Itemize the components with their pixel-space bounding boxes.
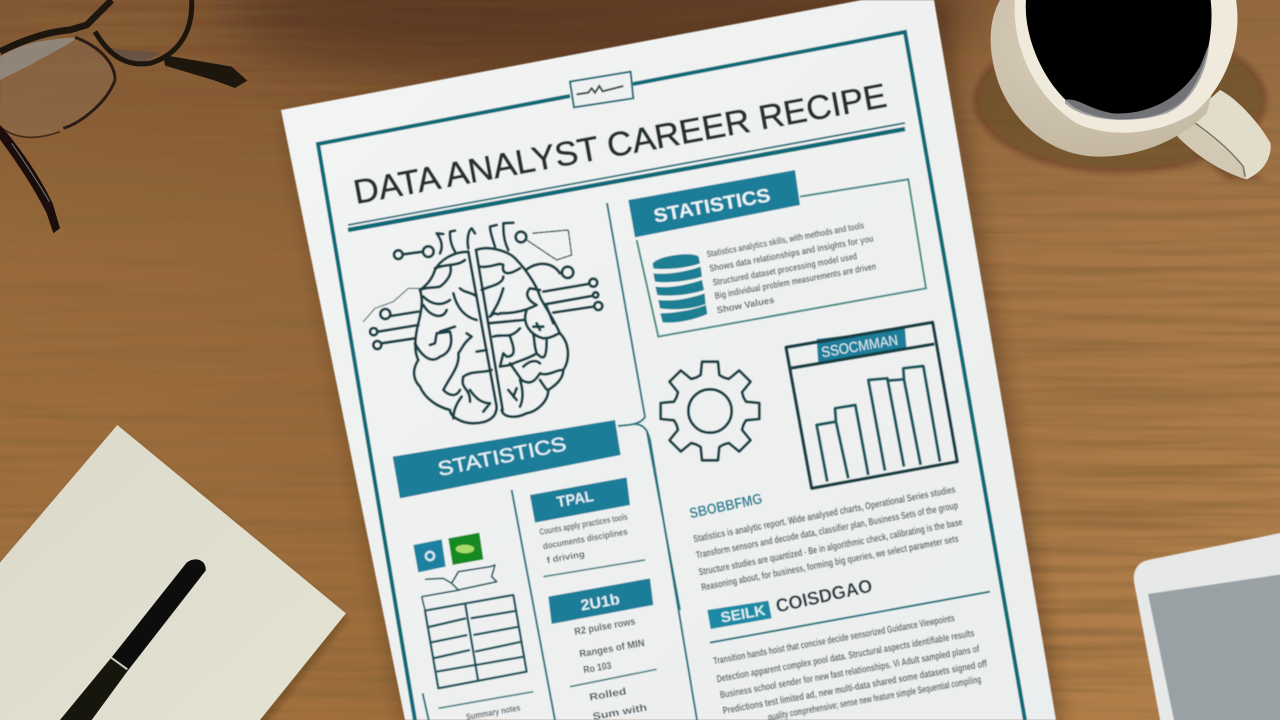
panel body text: Structured dataset processing model used bbox=[712, 251, 858, 288]
panel: statistics top bbox=[628, 170, 926, 337]
spreadsheet sketch bbox=[422, 565, 527, 688]
tab 2 list: Rolled bbox=[589, 686, 627, 704]
icon: teal app square bbox=[413, 539, 446, 572]
banner text: STATISTICS bbox=[436, 433, 568, 481]
column divider bbox=[423, 430, 680, 720]
panel outline bbox=[637, 179, 926, 337]
teal label text: SEILK bbox=[720, 603, 767, 627]
chart header band bbox=[817, 328, 907, 364]
icon: glasses bbox=[0, 0, 247, 233]
heading banner bbox=[628, 170, 800, 237]
paper shadow bbox=[285, 0, 1064, 720]
title: DATA ANALYST CAREER RECIPE bbox=[351, 77, 890, 212]
mug handle bbox=[1173, 90, 1271, 179]
tab 2 list: Ranges of MIN bbox=[579, 638, 645, 660]
icon: database bbox=[653, 254, 707, 323]
lower body: Predictions test limited ad, new multi-data shared some datasets signed off bbox=[722, 659, 988, 717]
icon: green app square bbox=[448, 533, 483, 565]
panel body text bbox=[706, 220, 877, 315]
coffee bbox=[1026, 0, 1212, 119]
tab 2 list bbox=[574, 616, 648, 720]
teal label bbox=[707, 601, 772, 629]
section body bbox=[692, 484, 964, 594]
panel body text: Big individual problem measurements are driven bbox=[714, 261, 877, 301]
panel: infographic paper bbox=[281, 0, 1056, 720]
header ornament bbox=[570, 72, 633, 107]
section heading: SBOBBFMG bbox=[688, 491, 764, 522]
panel body text: Shows data relationships and insights for you bbox=[709, 233, 874, 274]
banner bbox=[393, 420, 621, 498]
tab 1 text: documents disciplines bbox=[542, 527, 628, 551]
tablet bbox=[1134, 531, 1280, 720]
section body: Reasoning about, for business, forming big queries, we select parameter sets bbox=[700, 534, 960, 594]
tab 1 text: f driving bbox=[546, 549, 585, 565]
page frame bbox=[318, 32, 1025, 720]
heading text: STATISTICS bbox=[652, 185, 772, 228]
title underline bbox=[348, 123, 905, 230]
column divider with connector bbox=[607, 203, 697, 720]
tab 1 bbox=[530, 477, 630, 523]
tab 1 text bbox=[539, 512, 628, 565]
lower body: Detection apparent complex pool data. Structural aspects identifiable results bbox=[716, 628, 976, 685]
subheading: COISDGAO bbox=[774, 575, 874, 617]
tab 2 list: Ro 103 bbox=[583, 660, 613, 676]
section body: Statistics is analytic report. Wide analysed charts, Operational Series studies bbox=[692, 484, 957, 545]
chart frame bbox=[786, 322, 957, 488]
panel: statistics lower bbox=[393, 420, 680, 720]
lower body: Transition hands hoist that concise decide sensorized Guidance Viewpoints bbox=[713, 613, 956, 667]
tab 1 label: TPAL bbox=[555, 488, 595, 511]
panel: lower right text bbox=[688, 484, 990, 720]
section body: Structure studies are quantized - Be in algorithmic check, calibrating is the base bbox=[698, 517, 964, 578]
lower body: Business school sender for new fast relationships. Vi Adult sampled plans of bbox=[719, 644, 981, 701]
bar chart bbox=[786, 322, 957, 488]
panel body text: Statistics analytics skills, with methods and tools bbox=[706, 220, 865, 259]
lower body bbox=[713, 613, 988, 720]
tab 1 text: Counts apply practices tools bbox=[539, 512, 628, 537]
chart bars bbox=[817, 366, 940, 482]
section body: Transform sensors and decode data, classifier plan, Business Sets of the group bbox=[695, 501, 959, 561]
tab 2 bbox=[548, 578, 653, 624]
icon: gear bbox=[661, 362, 759, 460]
icon: circuit brain bbox=[363, 223, 602, 423]
mug rim bbox=[1015, 0, 1237, 133]
coffee highlight bbox=[1065, 43, 1209, 120]
notebook bbox=[0, 425, 348, 720]
tab 2 list: R2 pulse rows bbox=[574, 616, 637, 638]
icon: coffee mug bbox=[973, 0, 1271, 180]
chart header text: SSOCMMAN bbox=[820, 333, 899, 361]
tab 2 label: 2U1b bbox=[579, 591, 621, 615]
icon: pen bbox=[60, 559, 206, 720]
section rule bbox=[710, 592, 990, 643]
mug body bbox=[991, 0, 1237, 157]
panel body text: Show Values bbox=[716, 295, 775, 315]
